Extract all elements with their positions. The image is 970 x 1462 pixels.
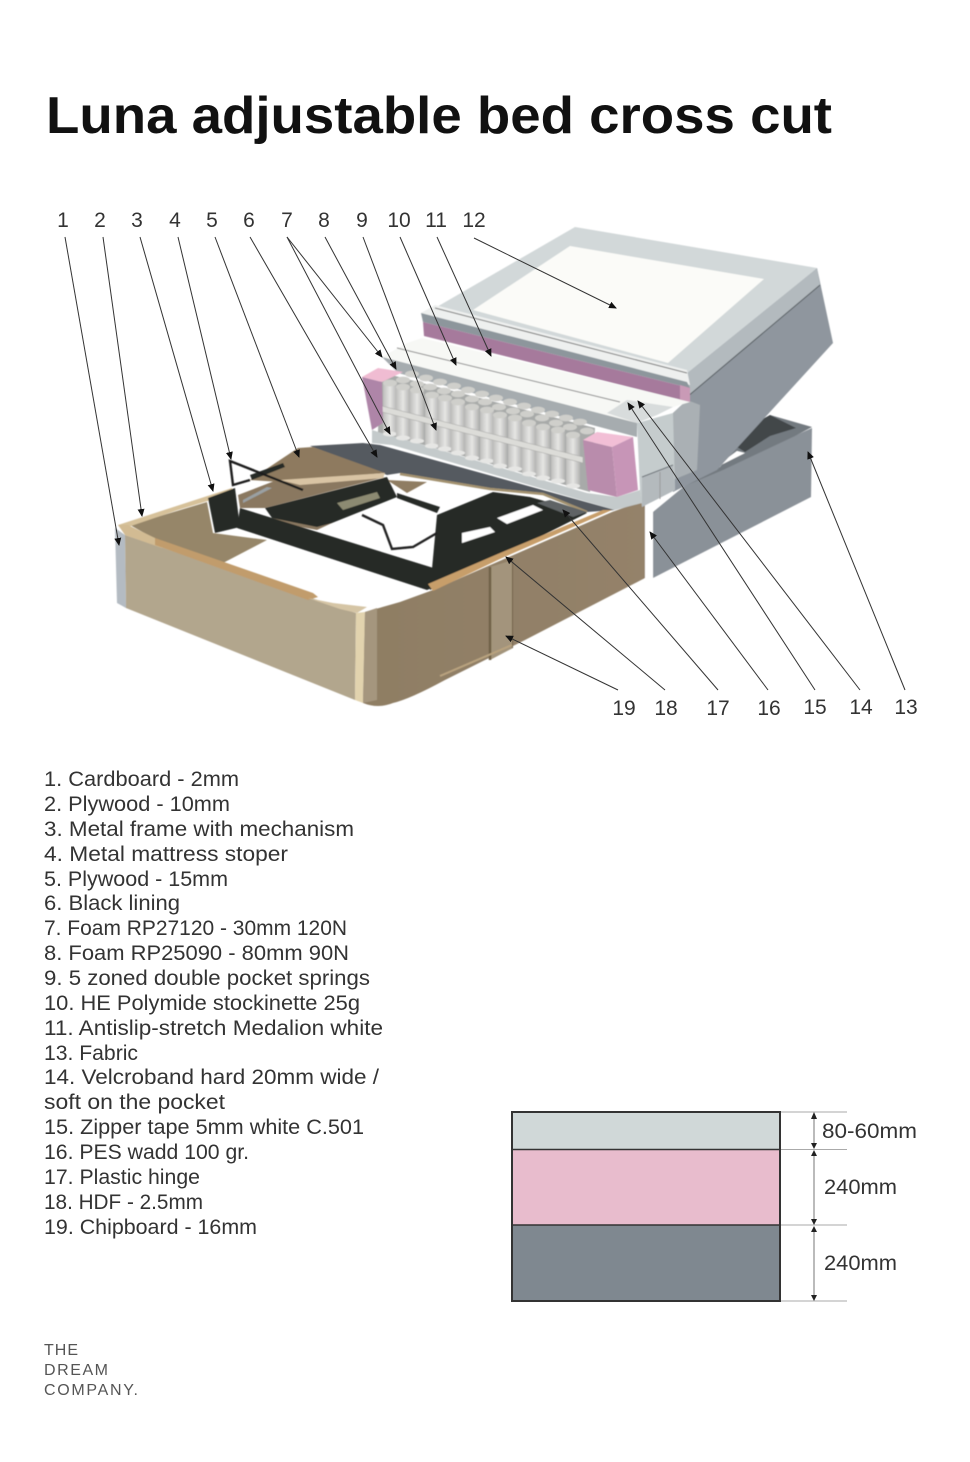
parts list: 9. 5 zoned double pocket springs: [44, 967, 370, 990]
company logo: DREAM: [44, 1362, 108, 1379]
metal frame with mechanism: [208, 463, 587, 590]
callout numbers, bottom: 13: [894, 696, 918, 719]
parts list: 1. Cardboard - 2mm: [44, 768, 239, 791]
spring cylinders, front row: [383, 380, 580, 488]
company logo: [44, 1342, 138, 1399]
dimension labels: [822, 1120, 917, 1275]
callout numbers, top: 12: [462, 209, 486, 232]
parts list: 16. PES wadd 100 gr.: [44, 1141, 249, 1164]
callout numbers, bottom: 19: [612, 697, 636, 720]
back-left top edge: [118, 488, 234, 527]
foam layers, grey and purple: [421, 313, 690, 402]
left-front base panel: [115, 525, 367, 703]
layer height diagram: [512, 1112, 917, 1301]
callout numbers, top: 9: [356, 209, 368, 232]
parts list: 10. HE Polymide stockinette 25g: [44, 992, 360, 1015]
parts list: [44, 768, 383, 1239]
parts list: soft on the pocket: [44, 1091, 225, 1114]
parts list: 11. Antislip-stretch Medalion white: [44, 1017, 383, 1040]
pocket spring unit: [362, 368, 642, 510]
bed cross cut illustration: [115, 227, 833, 706]
parts list: 15. Zipper tape 5mm white C.501: [44, 1116, 364, 1139]
callout numbers, top: 8: [318, 209, 330, 232]
callout numbers, top: 2: [94, 209, 106, 232]
callout numbers, top: 7: [281, 209, 293, 232]
middle white layer: [382, 338, 690, 437]
base interior back wall: [130, 502, 267, 563]
dimension labels: 240mm: [824, 1252, 897, 1275]
parts list: 5. Plywood - 15mm: [44, 868, 228, 891]
spring tops, back rows: [396, 371, 594, 434]
company logo: THE: [44, 1342, 78, 1359]
callout arrows: [65, 237, 905, 690]
spring divider strip: [378, 405, 583, 463]
pink foam end, right: [583, 432, 638, 497]
parts list: 14. Velcroband hard 20mm wide /: [44, 1066, 379, 1089]
parts list: 6. Black lining: [44, 892, 180, 915]
callout numbers, bottom: [612, 696, 918, 720]
upper panel, right side: [673, 268, 833, 492]
middle layer: [512, 1150, 780, 1225]
parts list: 19. Chipboard - 16mm: [44, 1216, 257, 1239]
parts list: 4. Metal mattress stoper: [44, 843, 288, 866]
upper panel, top face: [421, 227, 817, 385]
parts list: 13. Fabric: [44, 1042, 138, 1065]
parts list: 8. Foam RP25090 - 80mm 90N: [44, 942, 349, 965]
plywood top board: [250, 447, 587, 512]
corner side panel: [637, 413, 675, 507]
dimension labels: 240mm: [824, 1176, 897, 1199]
callout numbers, bottom: 15: [803, 696, 827, 719]
callout numbers, top: 4: [169, 209, 181, 232]
parts list: 3. Metal frame with mechanism: [44, 818, 354, 841]
callout numbers, top: 1: [57, 209, 69, 232]
title: Luna adjustable bed cross cut: [46, 87, 832, 145]
wall behind frame: [238, 477, 427, 530]
callout numbers, top: 10: [387, 209, 411, 232]
top layer: [512, 1112, 780, 1150]
callout numbers, top: 5: [206, 209, 218, 232]
dimension arrows: [811, 1112, 817, 1301]
company logo: COMPANY.: [44, 1382, 138, 1399]
bottom layer: [512, 1225, 780, 1301]
lower base block, fabric: [645, 415, 812, 580]
callout numbers, top: 3: [131, 209, 143, 232]
metal mattress stopper: [230, 461, 303, 490]
callout numbers, top: 6: [243, 209, 255, 232]
parts list: 7. Foam RP27120 - 30mm 120N: [44, 917, 347, 940]
callout numbers, top: 11: [425, 209, 447, 232]
callout numbers, bottom: 14: [849, 696, 873, 719]
callout numbers, bottom: 17: [706, 697, 730, 720]
callout numbers, top: [57, 209, 486, 232]
pink foam end, left: [362, 368, 403, 430]
callout numbers, bottom: 16: [757, 697, 781, 720]
parts list: 2. Plywood - 10mm: [44, 793, 230, 816]
dimension labels: 80-60mm: [822, 1120, 917, 1143]
parts list: 18. HDF - 2.5mm: [44, 1191, 203, 1214]
parts list: 17. Plastic hinge: [44, 1166, 200, 1189]
black lining: [310, 443, 615, 512]
callout numbers, bottom: 18: [654, 697, 678, 720]
right-front base panel: [363, 500, 645, 706]
